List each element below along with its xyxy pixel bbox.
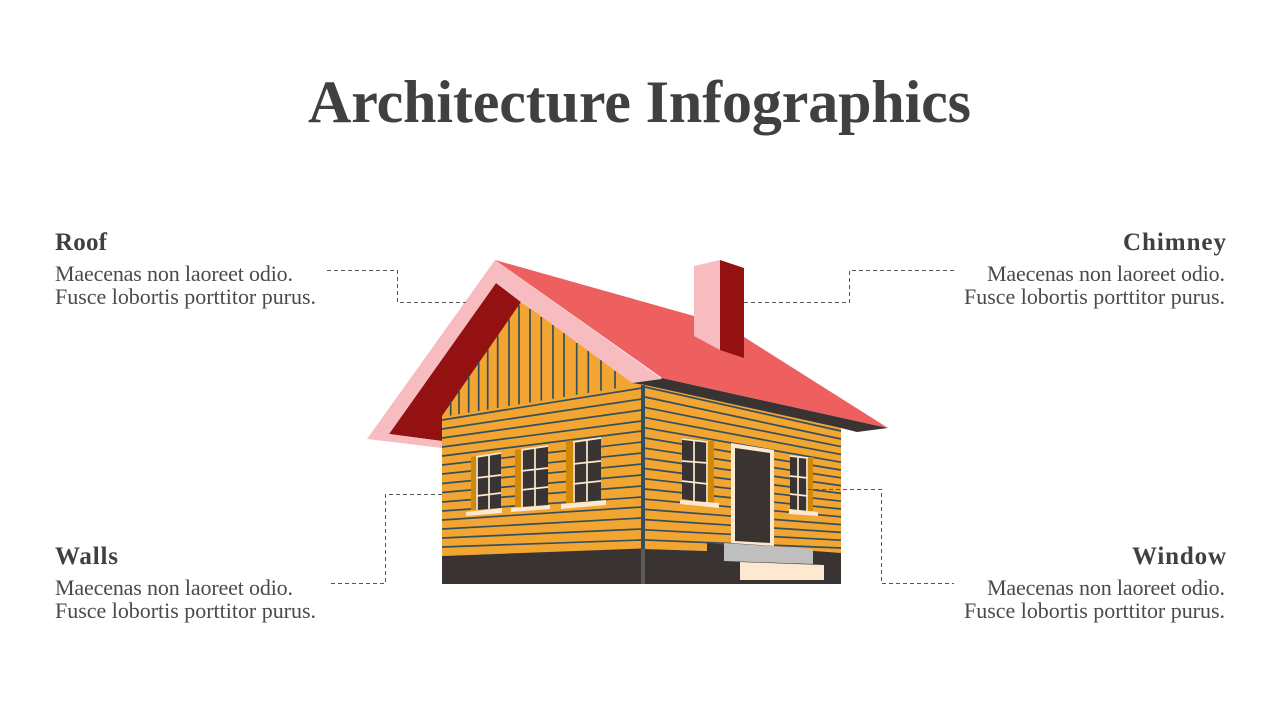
callout: walls: Maecenas non laoreet odio. — [55, 575, 293, 600]
steps — [724, 543, 824, 580]
window 3 — [561, 438, 606, 509]
window 5 — [789, 456, 818, 516]
right wall — [645, 385, 841, 555]
callout: chimney: Fusce lobortis porttitor purus. — [964, 284, 1225, 309]
connector: chimney — [744, 270, 954, 302]
roof surface — [495, 260, 888, 428]
eave shadow — [632, 378, 888, 432]
callout: walls: Walls — [55, 543, 118, 570]
window 1 — [466, 453, 502, 516]
window 2 — [511, 446, 550, 512]
window 4 — [680, 438, 719, 508]
callout: roof: Maecenas non laoreet odio. — [55, 261, 293, 286]
door — [731, 443, 774, 546]
chimney — [694, 260, 744, 358]
roof underside — [389, 283, 521, 441]
roof pink trim — [367, 260, 662, 448]
callout: chimney: Chimney — [1123, 229, 1226, 256]
gable wall — [442, 302, 642, 422]
callout: walls: Fusce lobortis porttitor purus. — [55, 598, 316, 623]
callout: roof: Fusce lobortis porttitor purus. — [55, 284, 316, 309]
connector: roof — [327, 270, 466, 302]
callout: roof — [55, 229, 316, 309]
left wall — [442, 384, 642, 556]
callout: roof: Roof — [55, 229, 108, 256]
callout: window: Fusce lobortis porttitor purus. — [964, 598, 1225, 623]
callout: window: Maecenas non laoreet odio. — [987, 575, 1225, 600]
connector: window — [808, 490, 954, 584]
callout: walls — [55, 543, 316, 623]
callout: chimney — [964, 229, 1226, 309]
callout: window: Window — [1132, 543, 1226, 570]
callout: chimney: Maecenas non laoreet odio. — [987, 261, 1225, 286]
house illustration — [367, 260, 888, 584]
connector: walls — [331, 494, 442, 584]
foundation — [442, 543, 841, 584]
corner downpipe — [641, 385, 645, 584]
title: Architecture Infographics — [308, 69, 971, 135]
callout: window — [964, 543, 1226, 623]
